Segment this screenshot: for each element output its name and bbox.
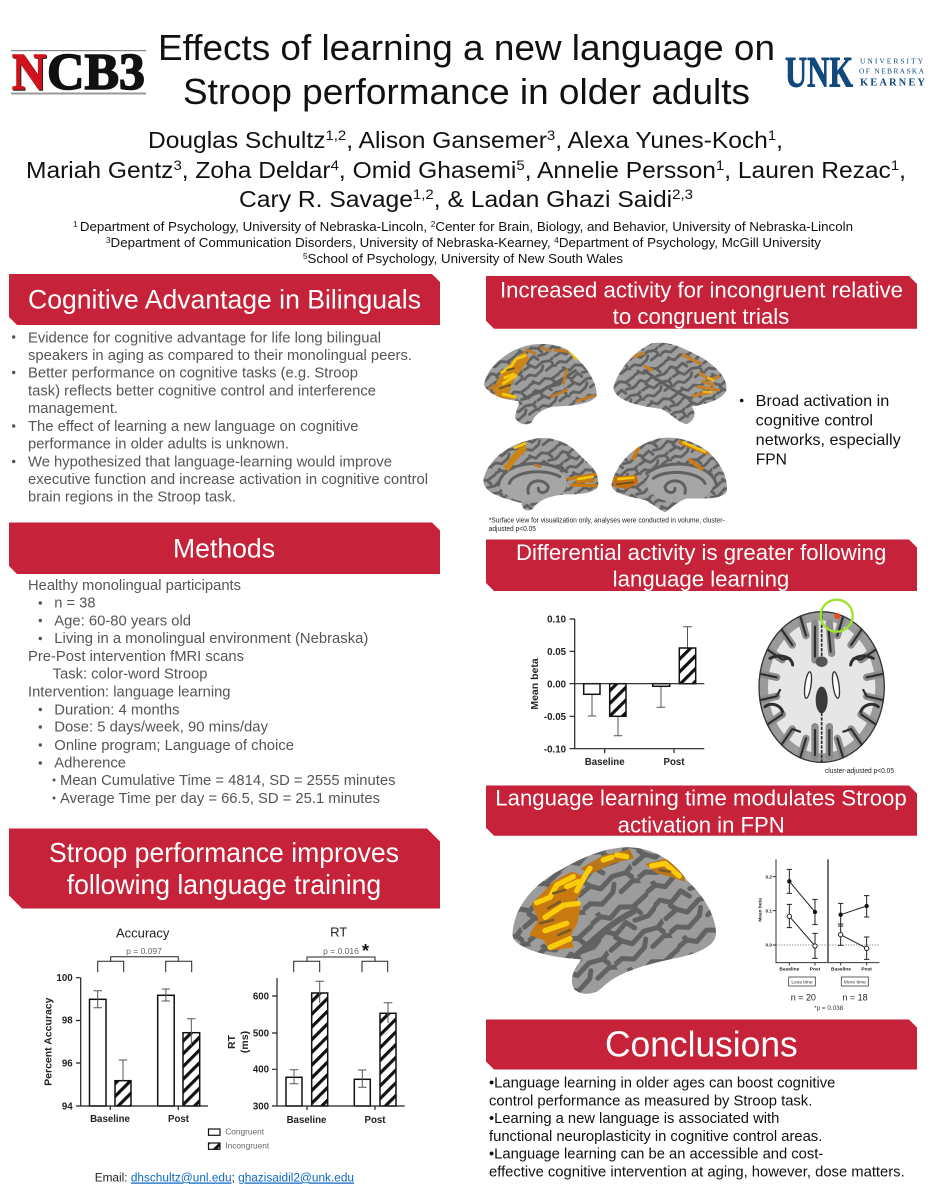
line chart: less vs more time: 0.2 xyxy=(766,874,772,879)
text block: conclusions: effective cognitive intervention at aging, however, dose matters. xyxy=(489,1164,905,1180)
bar chart: reaction time: (ms) xyxy=(239,1031,251,1053)
bar chart: accuracy: Percent Accuracy xyxy=(42,997,54,1086)
logo: NCB3: CB3 xyxy=(47,44,145,101)
bar chart: mean beta: Baseline xyxy=(585,757,625,768)
text block: background bullets: Better performance on cognitive tasks (e.g. Stroop xyxy=(28,366,358,382)
logo: NCB3: N xyxy=(12,44,46,101)
authors: , Alison Gansemer xyxy=(346,127,547,153)
heading: language learning time xyxy=(486,786,917,837)
logo: NCB3: N xyxy=(13,45,47,102)
note: cluster adjusted: cluster-adjusted p<0.05 xyxy=(825,768,894,775)
authors: 1 xyxy=(716,157,724,173)
text block: broad activation: Broad activation in xyxy=(756,393,889,410)
affiliations xyxy=(73,219,853,266)
title xyxy=(158,27,775,112)
legend: Congruent xyxy=(225,1127,265,1137)
line chart: less vs more time: More time xyxy=(844,979,866,985)
text block: methods details: Duration: 4 months xyxy=(54,702,179,718)
affiliations: Center for Brain, Biology, and Behavior, University of Nebraska-Lincoln xyxy=(435,219,853,234)
affiliations: 4 xyxy=(554,236,559,245)
heading: stroop performance xyxy=(9,828,440,908)
text block: conclusions: •Language learning in older ages can boost cognitive xyxy=(489,1076,835,1092)
text block: background bullets: performance in older adults is unknown. xyxy=(28,437,289,453)
text block: conclusions: functional neuroplasticity in cognitive control areas. xyxy=(489,1129,822,1145)
bar chart: reaction time: 600 xyxy=(253,992,269,1002)
text block: background bullets: management. xyxy=(28,401,118,417)
line chart: less vs more time: Baseline xyxy=(831,967,851,973)
authors: , xyxy=(899,157,906,183)
authors: Cary R. Savage xyxy=(239,186,401,212)
text block: background bullets: The effect of learning a new language on cognitive xyxy=(28,419,358,435)
heading: increased activity: Increased activity for incongruent relative xyxy=(500,277,903,302)
bar chart: accuracy: Accuracy xyxy=(116,926,170,940)
authors: , xyxy=(776,127,783,153)
heading: stroop performance: Stroop performance improves xyxy=(49,837,399,868)
text block: methods details: Age: 60-80 years old xyxy=(54,613,191,629)
text block: methods details: Adherence xyxy=(54,756,126,772)
text block: methods details: Pre-Post intervention fMRI scans xyxy=(28,649,244,665)
bar chart: reaction time: p = 0.016 xyxy=(323,946,359,956)
affiliations: 2 xyxy=(431,220,436,229)
line chart: less vs more time: Mean beta xyxy=(758,898,764,922)
authors: , & Ladan Ghazi Saidi xyxy=(434,186,672,212)
brain scan: axial slice with circled cluster xyxy=(758,600,885,763)
authors: 3 xyxy=(173,157,182,173)
text block: background bullets: speakers in aging as compared to their monolingual peers. xyxy=(28,348,412,364)
text block: broad activation: FPN xyxy=(756,451,787,468)
text block: conclusions: control performance as measured by Stroop task. xyxy=(489,1094,812,1110)
note: surface view: *Surface view for visualization only, analyses were conducted in volume, cluster- xyxy=(489,518,725,525)
authors: Douglas Schultz xyxy=(148,127,314,153)
heading: methods xyxy=(9,522,440,574)
authors: 1,2 xyxy=(413,186,434,202)
callout: green circle xyxy=(821,600,853,632)
line chart: less vs more time: n = 20 xyxy=(791,993,816,1003)
affiliations: 3 xyxy=(106,236,111,245)
bar chart: reaction time: 400 xyxy=(253,1064,269,1076)
text block: conclusions: •Learning a new language is associated with xyxy=(489,1111,779,1127)
heading: increased activity xyxy=(486,276,917,329)
text block: methods details: Mean Cumulative Time = 4814, SD = 2555 minutes xyxy=(60,773,396,789)
authors xyxy=(26,127,906,212)
text block: methods details: Average Time per day = 66.5, SD = 25.1 minutes xyxy=(60,791,380,807)
brain surface: lateral activation xyxy=(512,847,716,994)
heading: cognitive advantage xyxy=(9,274,440,325)
text block: broad activation: cognitive control xyxy=(756,413,873,430)
bar chart: mean beta: Post xyxy=(664,757,685,768)
logo: University of Nebraska Kearney: KEARNEY xyxy=(860,78,925,88)
text block: methods details xyxy=(28,578,396,807)
panel: methods xyxy=(9,522,440,807)
authors: , Omid Ghasemi xyxy=(339,157,516,183)
text block: background bullets: task) reflects better cognitive control and interference xyxy=(28,384,376,400)
text block: methods details: n = 38 xyxy=(54,596,96,612)
affiliations: Department of Psychology, University of Nebraska-Lincoln, xyxy=(80,219,431,234)
bar chart: reaction time: RT xyxy=(330,924,347,940)
bar chart: reaction time: * xyxy=(362,941,369,961)
bar chart: accuracy: 94 xyxy=(62,1102,73,1112)
bar chart: accuracy: Baseline xyxy=(90,1114,131,1125)
text block: conclusions: •Language learning can be an accessible and cost- xyxy=(489,1147,823,1163)
activation cluster xyxy=(834,613,840,619)
affiliations: 1 xyxy=(73,220,80,229)
bar chart: accuracy: 96 xyxy=(62,1058,73,1070)
bar chart: reaction time: RT xyxy=(226,1034,238,1049)
logo: University of Nebraska Kearney: OF NEBRASKA xyxy=(859,66,925,76)
icon: right medial brain xyxy=(612,438,727,512)
authors: 4 xyxy=(331,157,339,173)
authors: , Lauren Rezac xyxy=(724,157,891,183)
bar chart: accuracy: Post xyxy=(168,1114,190,1125)
text block: methods details: Online program; Language of choice xyxy=(54,738,294,754)
bar chart: accuracy: 100 xyxy=(57,973,73,984)
line chart: less vs more time: Baseline xyxy=(779,967,800,973)
heading: conclusions: Conclusions xyxy=(605,1024,798,1065)
bar chart: accuracy: p = 0.097 xyxy=(126,946,162,956)
line chart: less vs more time: Post xyxy=(810,967,821,973)
heading: differential activity: Differential activity is greater following xyxy=(516,540,886,565)
icon: right lateral brain xyxy=(613,342,727,424)
text block: methods details: Living in a monolingual environment (Nebraska) xyxy=(54,631,368,647)
bar chart: reaction time: 500 xyxy=(253,1028,269,1040)
heading: cognitive advantage: Cognitive Advantage in Bilinguals xyxy=(28,284,421,314)
panel: conclusions xyxy=(486,1020,917,1180)
heading: differential activity xyxy=(486,540,917,592)
logo: University of Nebraska Kearney: UNK xyxy=(785,50,853,96)
text block: background bullets: brain regions in the Stroop task. xyxy=(28,490,236,506)
text block: background bullets xyxy=(12,330,428,506)
note: surface view: adjusted p<0.05 xyxy=(489,526,536,533)
bar chart: mean beta: 0.00 xyxy=(547,680,566,690)
bar chart: accuracy xyxy=(42,926,208,1125)
heading: methods: Methods xyxy=(173,534,275,564)
panel: stroop performance xyxy=(9,828,440,1151)
text block: methods details: Healthy monolingual participants xyxy=(28,578,241,594)
bar chart: reaction time: Baseline xyxy=(287,1115,327,1126)
bar chart: mean beta: -0.05 xyxy=(544,712,567,723)
text block: conclusions xyxy=(489,1076,905,1180)
line chart: less vs more time: Less time xyxy=(791,979,813,985)
bar chart: accuracy: 98 xyxy=(62,1016,73,1026)
legend: Incongruent xyxy=(225,1141,270,1151)
authors: 1 xyxy=(891,157,899,173)
bar chart: mean beta: Mean beta xyxy=(529,658,541,710)
text block: broad activation: networks, especially xyxy=(756,432,901,449)
text block: methods details: Intervention: language learning xyxy=(28,685,230,701)
logo: University of Nebraska Kearney xyxy=(785,50,925,96)
authors: , Zoha Deldar xyxy=(182,157,331,183)
line chart: less vs more time: *p = 0.038 xyxy=(814,1005,844,1012)
icon: left medial brain xyxy=(483,438,598,510)
heading: increased activity: to congruent trials xyxy=(613,304,789,329)
panel: language learning time xyxy=(486,786,917,1012)
icon: left lateral brain xyxy=(484,344,597,424)
authors: 1,2 xyxy=(325,127,346,143)
affiliations: Department of Communication Disorders, University of Nebraska-Kearney, xyxy=(111,235,554,250)
panel: increased activity xyxy=(480,276,917,533)
bar chart: mean beta: -0.10 xyxy=(544,744,566,756)
line chart: less vs more time: 0.1 xyxy=(766,908,772,913)
authors: 5 xyxy=(516,157,525,173)
panel: cognitive advantage in bilinguals xyxy=(9,274,440,506)
text block: methods details: Task: color-word Stroop xyxy=(53,667,208,683)
text block: background bullets: executive function and increase activation in cognitive control xyxy=(28,472,428,488)
brain surface views xyxy=(480,340,730,515)
heading: conclusions xyxy=(486,1020,917,1070)
text block: background bullets: We hypothesized that language-learning would improve xyxy=(28,454,392,470)
line chart: less vs more time: Post xyxy=(861,967,872,973)
text block: background bullets: Evidence for cognitive advantage for life long bilingual xyxy=(28,330,381,346)
affiliations: 5 xyxy=(303,252,308,261)
text block: broad activation xyxy=(740,393,901,468)
affiliations: School of Psychology, University of New South Wales xyxy=(308,251,624,266)
text block: methods details: Dose: 5 days/week, 90 mins/day xyxy=(54,720,269,736)
affiliations: Department of Psychology, McGill University xyxy=(559,235,822,250)
title: Stroop performance in older adults xyxy=(183,71,750,112)
bar chart: mean beta: 0.10 xyxy=(547,614,566,626)
email contact: Email: dhschultz@unl.edu; ghazisaidil2@unk.edu xyxy=(95,1170,354,1184)
logo: University of Nebraska Kearney: UNIVERSITY xyxy=(860,56,924,66)
bar chart: reaction time: Post xyxy=(364,1115,386,1126)
heading: differential activity: language learning xyxy=(613,567,789,592)
authors: , Annelie Persson xyxy=(525,157,716,183)
legend xyxy=(208,1127,270,1151)
heading: stroop performance: following language training xyxy=(67,869,381,900)
bar chart: mean beta xyxy=(529,614,704,768)
bar chart: reaction time: 300 xyxy=(253,1102,269,1112)
bar chart: mean beta: 0.05 xyxy=(547,647,567,658)
heading: language learning time: activation in FPN xyxy=(618,812,785,837)
line chart: less vs more time: 0.0 xyxy=(766,943,772,948)
line chart: less vs more time xyxy=(758,859,879,1012)
bar chart: reaction time xyxy=(226,924,405,1126)
authors: Mariah Gentz xyxy=(26,157,164,183)
line chart: less vs more time: n = 18 xyxy=(842,993,868,1003)
authors: 2,3 xyxy=(672,186,693,202)
authors: 3 xyxy=(547,127,555,143)
authors: , Alexa Yunes-Koch xyxy=(555,127,768,153)
title: Effects of learning a new language on xyxy=(158,27,775,68)
note: surface view xyxy=(489,518,725,533)
heading: language learning time: Language learning time modulates Stroop xyxy=(495,786,907,811)
panel: differential activity xyxy=(486,540,917,775)
authors: 1 xyxy=(768,127,776,143)
